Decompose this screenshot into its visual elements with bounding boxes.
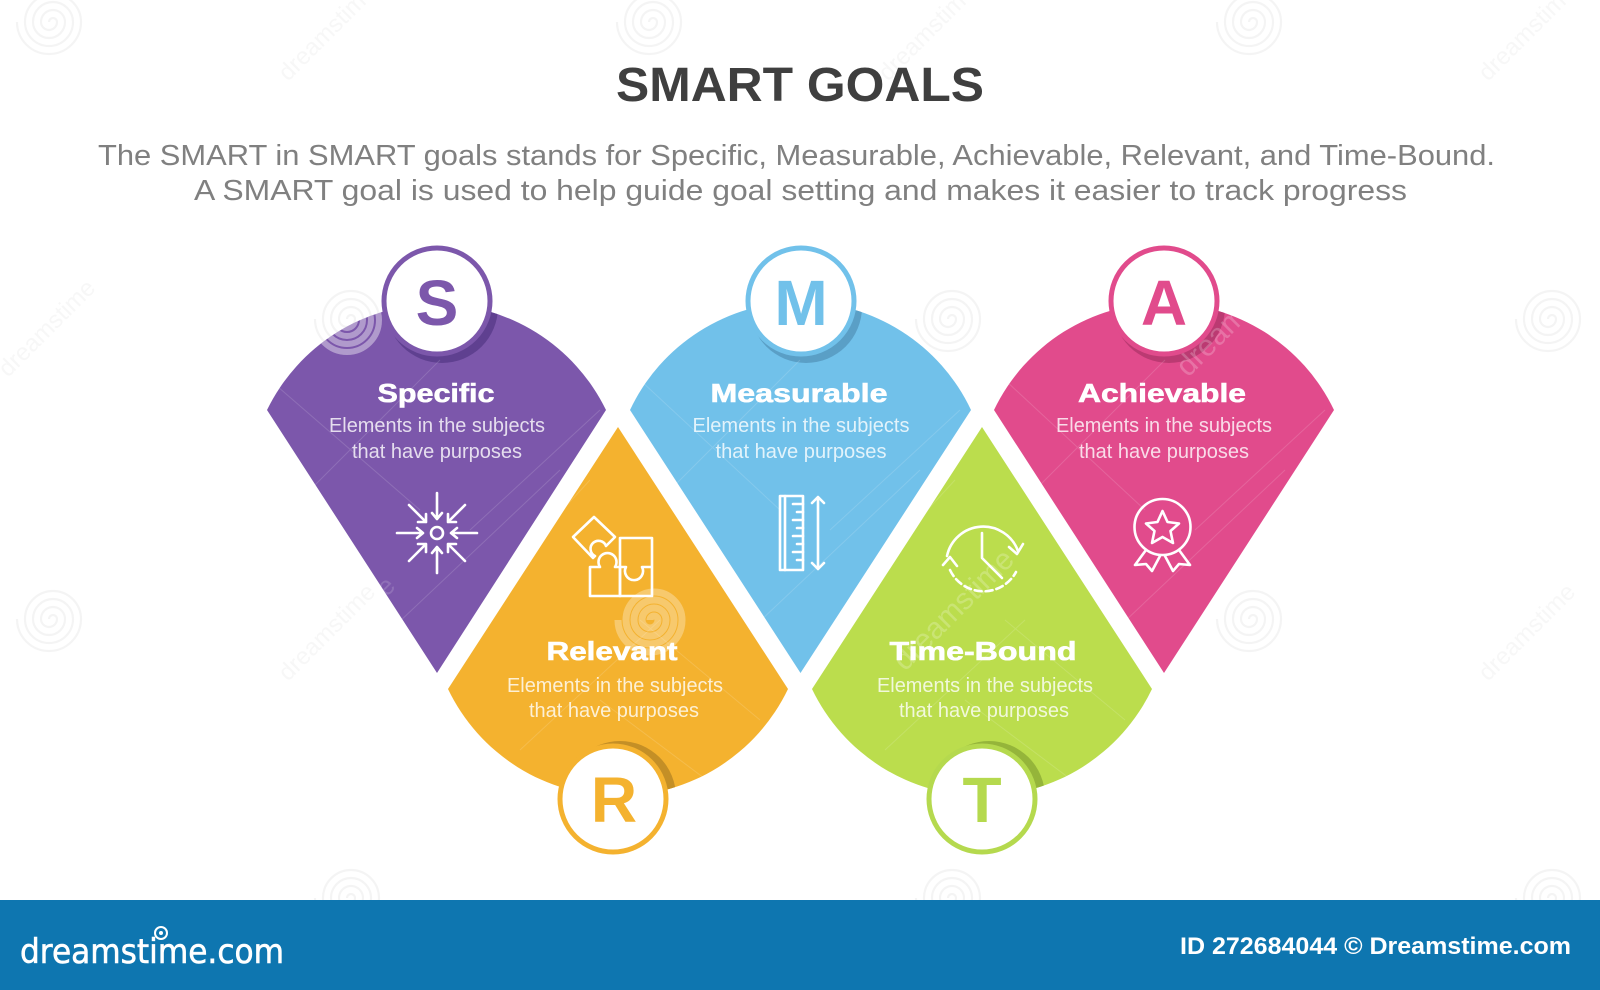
panel: achievable — [994, 248, 1334, 673]
letter badge R — [560, 746, 666, 852]
panel: measurable — [630, 248, 971, 673]
sector shape: relevant — [448, 427, 788, 796]
description: Measurable — [692, 414, 910, 463]
icon: puzzle pieces — [573, 517, 652, 596]
letter badge R: R — [591, 764, 637, 836]
sector shape: measurable — [630, 302, 971, 673]
panel: achievable: dream — [1170, 299, 1253, 383]
description: Specific: Elements in the subjects — [329, 414, 545, 437]
description: Measurable: Elements in the subjects — [692, 414, 910, 437]
subtitle text block: The SMART in SMART goals stands for Specific, Measurable, Achievable, Relevant, and Time-Bound. — [98, 140, 1495, 172]
subtitle text block — [98, 140, 1495, 207]
description: Time-Bound: that have purposes — [899, 699, 1069, 722]
description: Relevant: Elements in the subjects — [507, 674, 723, 697]
letter badge M — [748, 248, 854, 354]
sector shape: achievable — [994, 303, 1334, 673]
icon: clock with cycle arrows — [943, 527, 1023, 591]
footer bar — [0, 900, 1600, 990]
heading: Relevant: Relevant — [546, 636, 678, 666]
description: Relevant — [507, 674, 723, 722]
panel: time-bound — [812, 427, 1152, 853]
text: dreamstime — [273, 578, 381, 686]
panel: time-bound: dreamstime — [887, 543, 1021, 677]
letter badge S — [384, 248, 490, 354]
image id credit: ID 272684044 © Dreamstime.com — [1180, 933, 1571, 960]
description: Specific: that have purposes — [352, 440, 522, 463]
heading: Achievable: Achievable — [1078, 378, 1246, 408]
heading: Specific: Specific — [378, 378, 494, 408]
subtitle text block: A SMART goal is used to help guide goal setting and makes it easier to track progress — [194, 175, 1407, 207]
description: Relevant: that have purposes — [529, 699, 699, 722]
text: dreamstime — [1473, 578, 1581, 686]
heading: Time-Bound: Time-Bound — [890, 636, 1076, 666]
panel: relevant — [448, 427, 788, 853]
description: Achievable: that have purposes — [1079, 440, 1249, 463]
sector shape: time-bound — [812, 427, 1152, 796]
letter badge T: T — [962, 764, 1002, 836]
letter badge A: A — [1141, 267, 1187, 339]
sector shape: specific — [267, 304, 606, 673]
letter badge M: M — [774, 267, 828, 339]
letter badge A — [1111, 248, 1217, 354]
description: Achievable — [1056, 414, 1272, 463]
letter badge T — [929, 746, 1035, 852]
logo: dreamstime wordmark: dreamstime.com — [20, 932, 284, 972]
letter badge S: S — [416, 267, 458, 339]
icon: award medal — [1134, 499, 1190, 571]
panel: specific — [267, 248, 606, 673]
description: Specific — [329, 414, 545, 463]
description: Time-Bound: Elements in the subjects — [877, 674, 1093, 697]
panel: specific: time — [345, 570, 401, 626]
heading: Measurable: Measurable — [710, 378, 888, 408]
icon: converging arrows target — [397, 493, 477, 573]
description: Measurable: that have purposes — [716, 440, 886, 463]
icon: ruler with arrow — [780, 496, 824, 570]
description: Time-Bound — [877, 674, 1093, 722]
title: SMART GOALS — [616, 59, 984, 112]
description: Achievable: Elements in the subjects — [1056, 414, 1272, 437]
